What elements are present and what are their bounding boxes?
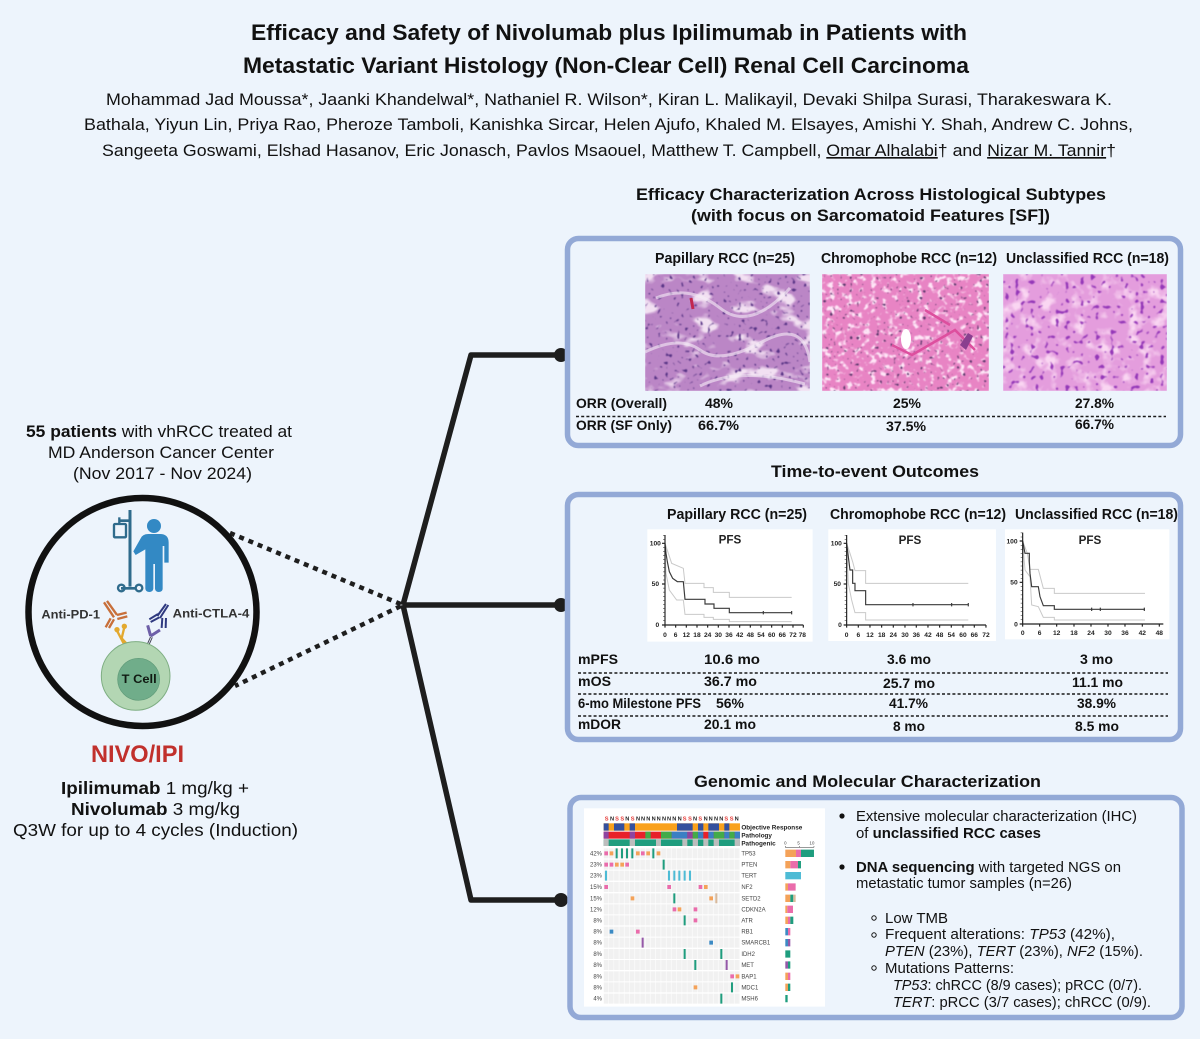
patient SF labels: SSSSSSSSS [605,817,734,823]
chart: chromophobe PFS: 0 [845,632,849,639]
subtype headers [667,507,1178,523]
title: Metastatic Variant Histology (Non-Clear Cell) Renal Cell Carcinoma [243,53,969,78]
chart: unclassified PFS: 42 [1139,630,1146,637]
dosing text: Q3W for up to 4 cycles (Induction) [13,820,298,840]
chart: unclassified PFS: 6 [1038,630,1042,637]
image: papillary histology [645,274,810,391]
gene labels: NF2 [741,885,753,891]
outcomes table: 6-mo Milestone PFS [578,696,701,711]
frequency bars: 0 [784,841,787,846]
chart: unclassified PFS [1005,529,1169,639]
chart: unclassified PFS: PFS [1079,534,1102,547]
authors: Bathala, Yiyun Lin, Priya Rao, Pheroze Tamboli, Kanishka Sircar, Helen Ajufo, Khaled M. Elsayes, Amishi Y. Shah, Andrew C. Johns, [84,116,1133,134]
frequency bars: 10 [810,841,815,846]
outcomes table: 41.7% [889,696,928,711]
panel: time-to-event [568,494,1180,740]
chart: papillary PFS: 36 [725,632,733,639]
alterations: other [610,930,713,945]
treatment circle diagram [28,498,256,726]
percent labels: 23% [590,863,603,869]
chart: unclassified PFS: 36 [1121,630,1129,637]
chart: chromophobe PFS: 24 [890,632,897,639]
ORR table: 27.8% [1075,396,1114,411]
icon: anti-CTLA-4 antibody [149,604,168,628]
chart: chromophobe PFS: 66 [971,632,978,639]
ORR table: 66.7% [698,418,739,433]
chart: papillary PFS: 48 [747,632,754,639]
gene labels: CDKN2A [741,907,766,913]
genomic findings text: Low TMB [885,911,948,927]
image: chromophobe histology [822,274,989,391]
chart: papillary PFS: 66 [779,632,786,639]
subtype headers: Papillary RCC (n=25) [655,251,795,267]
annotation tracks [604,823,740,846]
subtype headers [655,251,1169,267]
chart: unclassified PFS: 12 [1053,630,1061,637]
track labels [741,824,803,847]
chart: unclassified PFS: 24 [1087,630,1095,637]
ORR table: ORR (SF Only) [576,418,672,433]
chart: papillary PFS: 0 [663,632,667,639]
authors: Sangeeta Goswami, Elshad Hasanov, Eric Jonasch, Pavlos Msaouel, Matthew T. Campbell, Omar Alhalabi † and Nizar M. Tannir † [102,142,1116,160]
percent labels [590,851,603,1003]
track labels: Objective Response [741,824,803,831]
authors: Mohammad Jad Moussa*, Jaanki Khandelwal*, Nathaniel R. Wilson*, Kiran L. Malikayil, Devaki Shilpa Surasi, Tharakeswara K. [106,91,1112,109]
gene labels: MDC1 [741,985,759,991]
alterations: missense/pink [604,851,734,978]
chart: papillary PFS: PFS [719,533,742,546]
percent labels: 42% [590,851,603,857]
chart: chromophobe PFS [828,529,996,641]
outcomes table: 25.7 mo [883,676,935,691]
heading: time-to-event: Time-to-event Outcomes [771,462,979,481]
label: Anti-CTLA-4: Anti-CTLA-4 [173,606,250,620]
chart: chromophobe PFS: 72 [982,632,990,639]
ORR table: 66.7% [1075,417,1114,432]
outcomes table: 56% [716,696,744,711]
connector arrows [230,348,568,907]
gene labels: PTEN [741,863,757,869]
frequency bars [784,841,815,1002]
percent labels: 8% [593,918,603,924]
gene labels: RB1 [741,930,754,936]
gene labels: TP53 [741,851,756,857]
ORR table: 37.5% [886,419,926,434]
chart: papillary PFS: 50 [652,581,659,588]
chart: chromophobe PFS: 54 [948,632,955,639]
subtype headers: Unclassified RCC (n=18) [1006,251,1169,267]
chart: papillary PFS: 78 [799,632,806,639]
chart: papillary PFS: 42 [736,632,744,639]
icon: PD-1 receptor [114,624,129,646]
gene labels: IDH2 [741,952,756,958]
icon: IV pole [114,510,142,591]
heading: efficacy: Efficacy Characterization Across Histological Subtypes [636,185,1106,204]
chart: unclassified PFS: 18 [1070,630,1078,637]
authors [84,91,1133,160]
ORR table [576,396,1166,434]
outcomes table: 3 mo [1080,652,1113,667]
icon: T cell: T Cell [122,672,157,686]
gene labels: BAP1 [741,974,757,980]
subtype headers: Unclassified RCC (n=18) [1015,507,1178,523]
chart: chromophobe PFS: 60 [959,632,967,639]
chart: papillary PFS: 0 [655,622,659,629]
gene labels: ATR [741,918,754,924]
panel: efficacy [568,238,1180,446]
chart: chromophobe PFS: 6 [856,632,860,639]
outcomes table: 20.1 mo [704,717,756,732]
outcomes table: 3.6 mo [887,652,931,667]
ORR table: ORR (Overall) [576,396,667,411]
outcomes table: 8 mo [893,719,925,734]
chart: chromophobe PFS: 0 [838,622,842,629]
outcomes table: 36.7 mo [704,674,757,689]
percent labels: 8% [593,941,603,947]
outcomes table: mOS [578,674,611,689]
subtype headers: Chromophobe RCC (n=12) [830,507,1006,523]
patient description: MD Anderson Cancer Center [48,443,274,462]
alterations: cyan bars [605,871,691,881]
dosing text: Nivolumab 3 mg/kg [71,799,240,819]
track labels: Pathogenic [741,840,776,847]
chart: papillary PFS: 72 [789,632,797,639]
ORR table: 25% [893,396,921,411]
gene labels: SETD2 [741,896,761,902]
genomic findings text [839,809,1151,1011]
chart: papillary PFS [647,529,813,642]
chart: papillary PFS: 30 [715,632,722,639]
gene labels: TERT [741,874,757,880]
chart: oncoprint [584,808,825,1007]
percent labels: 8% [593,952,603,958]
chart: papillary PFS: 54 [757,632,765,639]
genomic findings text: PTEN (23%), TERT (23%), NF2 (15%). [885,944,1143,960]
chart: unclassified PFS: 30 [1104,630,1112,637]
patient description [26,422,292,483]
heading: genomic: Genomic and Molecular Characterization [694,772,1041,791]
chart: chromophobe PFS: 36 [913,632,920,639]
outcomes table: 38.9% [1077,696,1116,711]
genomic findings text: Extensive molecular characterization (IHC) [856,809,1137,825]
frequency bars: 5 [797,841,800,846]
chart: papillary PFS: 60 [768,632,776,639]
chart: unclassified PFS: 48 [1156,630,1163,637]
track labels: Pathology [741,832,772,839]
icon: anti-PD-1 antibody [104,601,127,628]
gene labels: MSH6 [741,997,759,1003]
chart: chromophobe PFS: 50 [834,581,841,588]
subtype headers: Papillary RCC (n=25) [667,507,807,523]
outcomes table: mDOR [578,717,621,732]
chart: chromophobe PFS: 42 [924,632,932,639]
icon: patient [133,519,169,592]
ORR table: 48% [705,396,733,411]
dosing text: Ipilimumab 1 mg/kg + [61,778,249,798]
chart: chromophobe PFS: 12 [866,632,874,639]
outcomes table: 8.5 mo [1075,719,1119,734]
chart: unclassified PFS: 0 [1021,630,1025,637]
percent labels: 8% [593,930,603,936]
chart: unclassified PFS: 50 [1010,580,1018,587]
heading: efficacy: (with focus on Sarcomatoid Features [SF]) [691,206,1050,225]
title: Efficacy and Safety of Nivolumab plus Ipilimumab in Patients with [251,20,967,45]
chart: chromophobe PFS: 100 [831,540,842,547]
genomic findings text: DNA sequencing with targeted NGS on [856,860,1121,876]
dosing text [13,778,298,840]
chart: unclassified PFS: 0 [1014,621,1018,628]
label: Anti-PD-1: Anti-PD-1 [41,608,100,622]
outcomes table [578,652,1168,734]
patient description: (Nov 2017 - Nov 2024) [73,464,252,483]
chart: chromophobe PFS: 18 [878,632,886,639]
chart: chromophobe PFS: 48 [936,632,944,639]
panel: genomic [570,798,1182,1018]
alterations: teal bars [616,848,733,1004]
genomic findings text: TP53: chRCC (8/9 cases); pRCC (0/7). [893,978,1142,994]
chart: unclassified PFS: 100 [1006,538,1018,545]
title [243,20,969,78]
subtype headers: Chromophobe RCC (n=12) [821,251,997,267]
patient description: 55 patients with vhRCC treated at [26,422,292,441]
NIVO/IPI heading: NIVO/IPI [91,741,184,768]
chart: chromophobe PFS: 30 [901,632,909,639]
percent labels: 8% [593,963,603,969]
genomic findings text: Mutations Patterns: [885,961,1014,977]
chart: papillary PFS: 12 [683,632,690,639]
icon: T cell [101,642,170,710]
genomic findings text: of unclassified RCC cases [856,826,1041,842]
percent labels: 8% [593,974,603,980]
genomic findings text: TERT: pRCC (3/7 cases); chRCC (0/9). [893,995,1151,1011]
gene labels [741,851,771,1003]
outcomes table: mPFS [578,652,618,667]
chart: papillary PFS: 24 [704,632,712,639]
gene labels: MET [741,963,754,969]
icon: CTLA-4 receptor [145,625,160,649]
heading: efficacy [636,185,1106,225]
percent labels: 15% [590,885,603,891]
image: unclassified histology [1003,274,1167,391]
grid rows [604,848,740,1004]
gene labels: SMARCB1 [741,941,771,947]
percent labels: 12% [590,907,603,913]
outcomes table: 11.1 mo [1072,675,1123,690]
alterations: orange [610,851,739,989]
percent labels: 23% [590,874,603,880]
chart: papillary PFS: 100 [650,540,661,547]
genomic findings text: metastatic tumor samples (n=26) [856,876,1072,892]
outcomes table: 10.6 mo [704,652,760,667]
percent labels: 4% [593,997,603,1003]
chart: papillary PFS: 6 [674,632,678,639]
patient SF labels: NNNNNNNNNNNNNNNNN [610,817,739,823]
chart: chromophobe PFS: PFS [899,534,922,547]
percent labels: 15% [590,896,603,902]
percent labels: 8% [593,985,603,991]
chart: papillary PFS: 18 [693,632,701,639]
genomic findings text: Frequent alterations: TP53 (42%), [885,927,1115,943]
